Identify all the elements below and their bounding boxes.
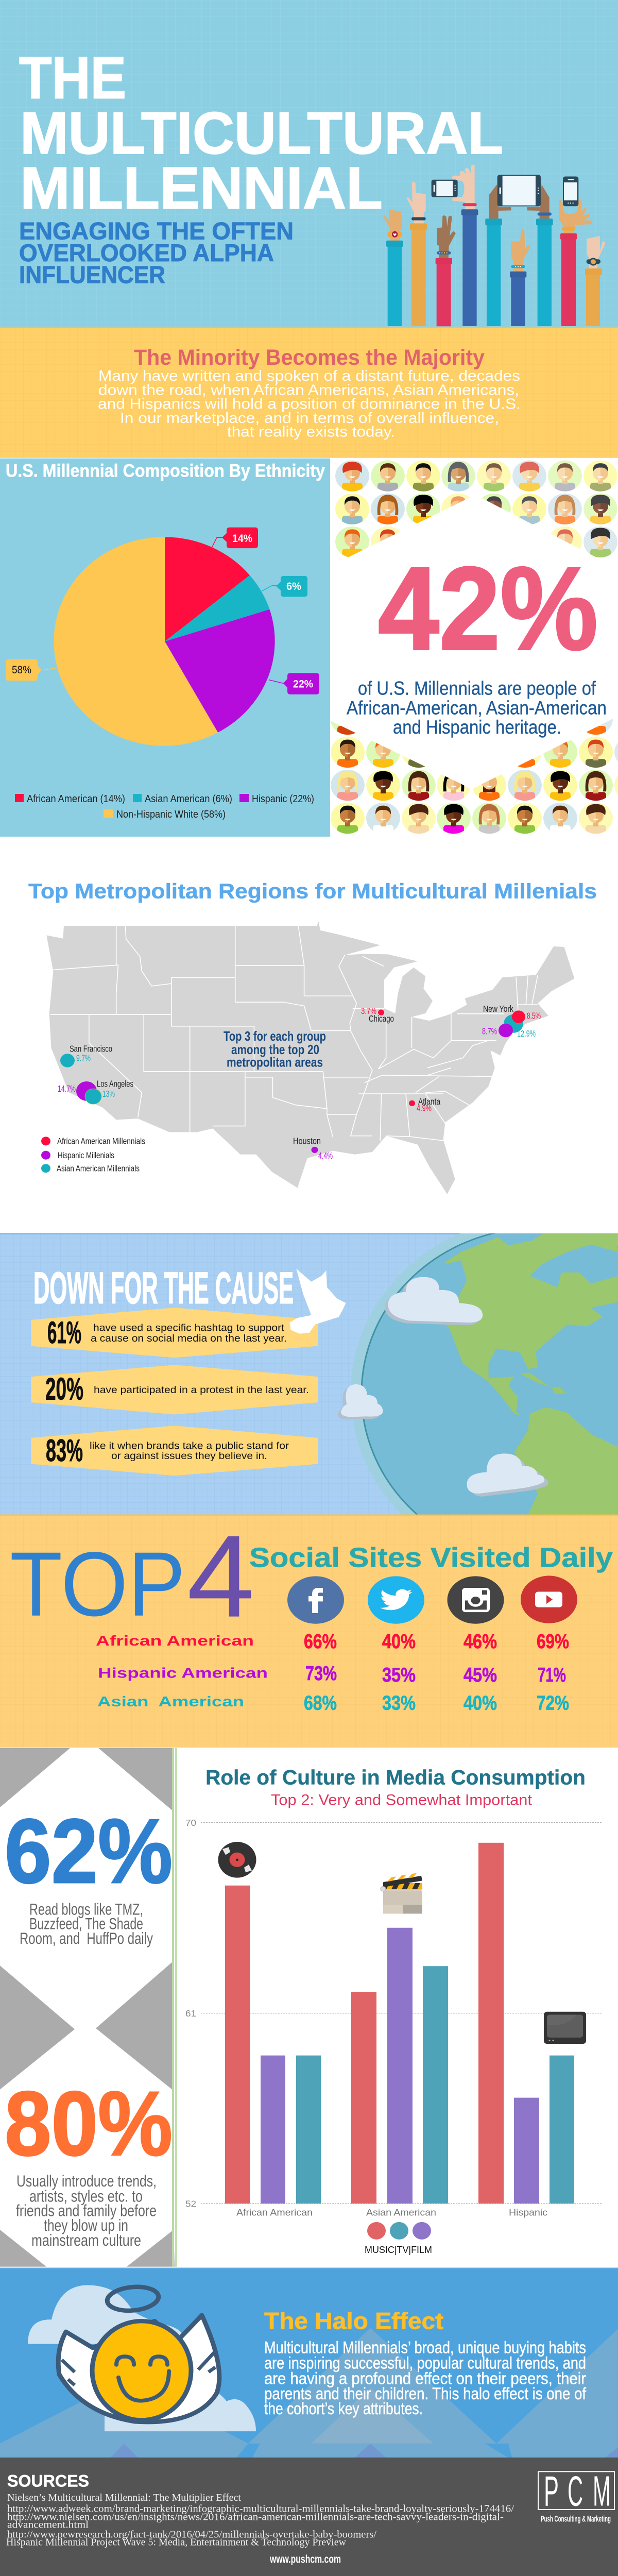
body text: In our marketplace, and in terms of overall influence, xyxy=(120,411,499,427)
callout: 58% xyxy=(6,659,58,681)
panel: the halo effect xyxy=(0,2268,618,2458)
row: Asian American: 72% xyxy=(537,1692,569,1714)
title xyxy=(19,45,503,222)
source list xyxy=(6,2492,514,2548)
bars: Asian American xyxy=(351,1928,448,2204)
panel: hero header xyxy=(0,0,618,327)
bars: Hispanic xyxy=(478,1843,574,2204)
source list: Nielsen’s Multicultural Millennial: The Multiplier Effect xyxy=(7,2492,241,2503)
map labels: Houston xyxy=(293,1136,321,1146)
logo: PCM: C xyxy=(568,2468,583,2515)
panel: left stats column xyxy=(0,1748,177,2267)
heading: TOP 4: 4 xyxy=(187,1512,254,1641)
map labels: 13% xyxy=(102,1089,115,1099)
panel: 42% callout with avatars xyxy=(331,460,618,837)
stat text: trends: they blow up in xyxy=(44,2216,128,2234)
map bubbles xyxy=(60,1009,525,1153)
arm 4 holding phone xyxy=(432,165,478,326)
stat: 83% xyxy=(31,1426,318,1476)
logo: PCM xyxy=(538,2468,614,2523)
stat: 61%: 61% xyxy=(47,1316,81,1350)
title: THE xyxy=(19,45,126,111)
avatar grid xyxy=(331,460,618,837)
stat text: blogs: Read blogs like TMZ, xyxy=(29,1900,143,1918)
stat: 20%: 20% xyxy=(45,1372,83,1406)
arm 1 with heart watch xyxy=(383,210,403,326)
panel: top 4 social sites xyxy=(0,1512,618,1748)
row: Hispanic American: 35% xyxy=(382,1664,416,1686)
map labels: 12.9% xyxy=(517,1028,536,1039)
stat: 83%: 83% xyxy=(46,1434,83,1468)
source list: Hispanic Millennial Project Wave 5: Media, Entertainment & Technology Preview xyxy=(6,2537,346,2548)
map labels: San Francisco xyxy=(70,1043,112,1054)
map note xyxy=(224,1029,326,1070)
heading: Role of Culture in Media Consumption xyxy=(205,1766,586,1789)
gridlines and axis labels: 70 xyxy=(185,1817,196,1828)
bars: African American xyxy=(225,1886,321,2204)
icon: film clapper xyxy=(381,1873,422,1913)
panel: down for the cause xyxy=(0,1233,618,1515)
row: African American: 46% xyxy=(464,1631,497,1653)
row: African American xyxy=(96,1631,569,1653)
map labels: Chicago xyxy=(369,1013,394,1024)
heading: The Minority Becomes the Majority xyxy=(134,345,485,370)
subtitle: OVERLOOKED ALPHA xyxy=(19,240,274,267)
heading: U.S. Millennial Composition By Ethnicity xyxy=(6,461,325,481)
source list: advancement.html xyxy=(7,2519,89,2531)
map note: among the top 20 xyxy=(231,1042,319,1057)
panel: role of culture bar chart xyxy=(185,1766,602,2256)
body text: the cohort’s key attributes. xyxy=(264,2399,423,2418)
callout: 14% xyxy=(212,528,258,548)
row: Asian American: 33% xyxy=(382,1692,416,1714)
icon: youtube xyxy=(521,1575,577,1623)
row: Hispanic American: 73% xyxy=(305,1663,337,1685)
panel: top metropolitan regions map xyxy=(28,879,597,1194)
stat: 20%: have participated in a protest in the last year. xyxy=(94,1385,309,1396)
map labels: 8.5% xyxy=(527,1010,541,1021)
stat text: blogs: Buzzfeed, The Shade xyxy=(29,1914,143,1933)
statistic description: and Hispanic heritage. xyxy=(393,717,561,738)
legend: Asian American (6%) xyxy=(145,793,232,805)
icon: facebook xyxy=(287,1576,344,1624)
website: www.pushcm.com xyxy=(269,2552,341,2565)
subtitle: ENGAGING THE OFTEN xyxy=(19,218,294,245)
stat: 61%: have used a specific hashtag to support xyxy=(93,1323,284,1333)
white hexagon behind statistic xyxy=(331,495,618,789)
arm 6 pointing xyxy=(510,229,530,326)
stat: 61%: a cause on social media on the last year. xyxy=(91,1333,287,1344)
map labels: 3.7% xyxy=(361,1005,376,1016)
stat: 83%: or against issues they believe in. xyxy=(111,1451,267,1462)
arms 5 and 7 holding tablet xyxy=(485,175,553,326)
clouds xyxy=(338,1277,548,1497)
stat: 20% xyxy=(31,1365,318,1415)
map note: metropolitan areas xyxy=(227,1055,323,1070)
row: Hispanic American: Hispanic American xyxy=(98,1665,268,1681)
pie chart xyxy=(54,537,275,746)
stat text: trends xyxy=(16,2172,157,2249)
legend: Hispanic (22%) xyxy=(252,793,314,805)
stat text: trends: mainstream culture xyxy=(31,2231,141,2249)
legend: Non-Hispanic White (58%) xyxy=(116,808,226,820)
stat: 62%: 62% xyxy=(5,1800,173,1902)
map labels: 4.9% xyxy=(417,1103,432,1113)
arm 9 with watch xyxy=(585,236,606,326)
globe illustration xyxy=(351,1233,618,1515)
stat: 61% xyxy=(31,1308,318,1358)
map labels: 14.7% xyxy=(58,1083,76,1094)
row: African American: 40% xyxy=(382,1631,416,1653)
callout: 22% xyxy=(269,673,319,694)
heading: The Halo Effect xyxy=(264,2308,443,2334)
map labels: Los Angeles xyxy=(97,1078,133,1089)
row: Hispanic American: 71% xyxy=(538,1664,566,1686)
legend: African American (14%) xyxy=(27,793,125,805)
callout: 22%: 22% xyxy=(293,677,313,690)
row: African American: 66% xyxy=(304,1631,337,1653)
icon: white dove xyxy=(289,1269,346,1334)
category labels xyxy=(236,2207,547,2218)
triangle pattern xyxy=(0,2328,618,2458)
callout: 6% xyxy=(262,576,307,597)
callout: 6%: 6% xyxy=(286,580,301,592)
icon: raised hands holding devices xyxy=(383,165,606,326)
row: Asian American: Asian American xyxy=(97,1693,244,1709)
title: MULTICULTURAL xyxy=(20,100,503,166)
row: Asian American: 68% xyxy=(304,1692,337,1714)
stat text: trends: friends and family before xyxy=(16,2201,157,2219)
source list: http://www.nielsen.com/us/en/insights/news/2016/african-american-millennials-are-tech-savvy-leaders-in-digital- xyxy=(7,2512,504,2522)
panel: the minority becomes the majority xyxy=(0,327,618,458)
row: Asian American xyxy=(97,1692,569,1714)
chart legend xyxy=(365,2222,432,2256)
map legend xyxy=(41,1136,145,1173)
icon: twitter xyxy=(368,1576,424,1624)
map labels: Atlanta xyxy=(418,1096,441,1107)
category labels: Hispanic xyxy=(509,2207,547,2218)
body text: down the road, when African Americans, Asian Americans, xyxy=(98,382,519,398)
source list: http://www.adweek.com/brand-marketing/infographic-multicultural-millennials-take-brand-loyalty-seriously-174416/ xyxy=(7,2503,514,2514)
arm 8 holding phone xyxy=(559,176,592,326)
heading: social sites visited daily: Social Sites Visited Daily xyxy=(249,1542,613,1573)
panel: composition pie chart xyxy=(0,459,330,837)
legend xyxy=(15,793,314,820)
icon: instagram xyxy=(447,1576,504,1624)
icon: vinyl record xyxy=(218,1842,256,1878)
map labels: 4.4% xyxy=(318,1150,333,1161)
heading: SOURCES xyxy=(7,2471,89,2490)
callout: 14%: 14% xyxy=(232,532,252,545)
row: African American: 69% xyxy=(537,1631,569,1653)
panel: down for the cause: DOWN FOR THE CAUSE xyxy=(33,1263,294,1313)
row: Hispanic American xyxy=(98,1663,566,1686)
icon: television xyxy=(544,2012,586,2044)
gridlines and axis labels xyxy=(185,1817,602,2209)
stat: 83%: like it when brands take a public stand for xyxy=(90,1440,289,1451)
stat: 80%: 80% xyxy=(5,2073,173,2175)
gridlines and axis labels: 61 xyxy=(185,2008,196,2019)
stat text: blogs xyxy=(20,1900,153,1947)
map legend: African American Millennials xyxy=(57,1136,145,1146)
source list: http://www.pewresearch.org/fact-tank/2016/04/25/millennials-overtake-baby-boomers/ xyxy=(7,2529,376,2540)
stat text: trends: artists, styles etc. to xyxy=(29,2187,143,2205)
map legend: Hispanic Millenials xyxy=(58,1150,114,1160)
row: Hispanic American: 45% xyxy=(464,1664,497,1686)
map labels: 8.7% xyxy=(482,1026,497,1036)
body text: that reality exists today. xyxy=(227,424,395,440)
map of the United States xyxy=(46,921,574,1194)
body text xyxy=(264,2338,587,2418)
map labels: New York xyxy=(483,1004,514,1014)
panel: sources footer xyxy=(0,2458,618,2576)
map labels: 9.7% xyxy=(76,1053,91,1063)
callout: 58%: 58% xyxy=(12,664,31,676)
row: African American: African American xyxy=(96,1633,254,1649)
body text: and Hispanics will hold a position of dominance in the U.S. xyxy=(98,396,521,412)
logo: PCM: P xyxy=(544,2468,559,2515)
stat text: trends: Usually introduce trends, xyxy=(16,2172,157,2190)
subheading: Top 2: Very and Somewhat Important xyxy=(271,1792,533,1808)
arm 3 peace sign xyxy=(436,215,456,326)
icon: angel smiley xyxy=(58,2284,219,2422)
map labels xyxy=(58,1004,541,1161)
gridlines and axis labels: 52 xyxy=(185,2198,196,2209)
heading: Top Metropolitan Regions for Multicultural Millenials xyxy=(28,879,597,903)
stat text: blogs: Room, and HuffPo daily xyxy=(20,1929,153,1947)
statistic description xyxy=(347,679,607,738)
row: Asian American: 40% xyxy=(464,1692,497,1714)
heading: TOP 4: TOP xyxy=(10,1533,185,1635)
body text xyxy=(98,368,521,440)
icon: clouds xyxy=(28,2285,256,2431)
chart legend: MUSIC|TV|FILM xyxy=(365,2245,432,2256)
map note: Top 3 for each group xyxy=(224,1029,326,1044)
map legend: Asian American Millennials xyxy=(57,1163,140,1173)
title: MILLENNIAL xyxy=(20,156,383,222)
category labels: African American xyxy=(236,2207,313,2218)
heading: TOP 4 xyxy=(10,1512,254,1641)
category labels: Asian American xyxy=(366,2207,436,2218)
arm 2 pointing xyxy=(407,182,427,326)
subtitle xyxy=(19,218,294,289)
body text: Many have written and spoken of a distant future, decades xyxy=(98,368,520,384)
subtitle: INFLUENCER xyxy=(19,262,165,289)
